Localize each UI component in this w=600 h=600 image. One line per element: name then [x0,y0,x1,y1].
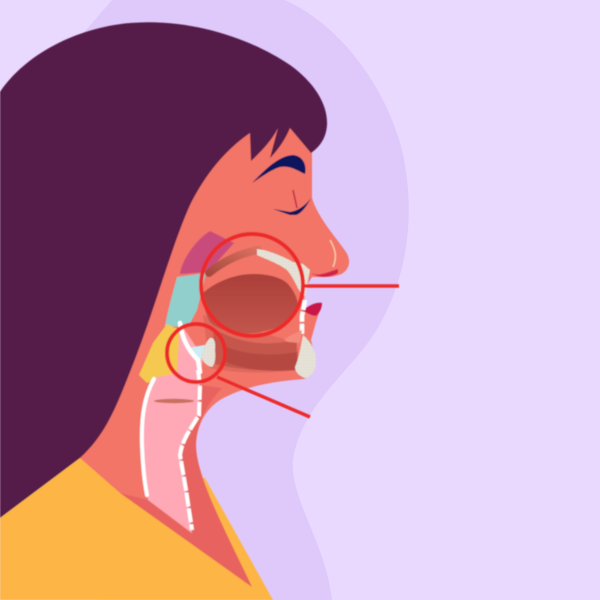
small red circle: throat area [167,324,225,382]
airway light blue [188,345,205,360]
yellow cartilage [139,324,180,383]
throat muscle bands [203,315,300,373]
trachea front dashed line [180,370,200,530]
white mouth line [302,300,305,335]
soft palate [209,250,258,273]
epiglottis white outline [180,323,200,372]
teal pharynx section [165,273,206,327]
lavender background shape [60,0,409,600]
upper lip [311,269,338,277]
trachea ridge [154,399,194,403]
yellow shirt [0,458,273,600]
eyebrow [252,155,306,183]
lower lip [303,303,322,316]
pointer line from small circle [217,377,310,417]
nasopharynx [180,231,234,274]
face and neck skin [80,120,349,587]
closed eye and lashes [273,198,311,215]
chin deposit [295,335,316,378]
trachea back line [142,379,154,495]
eye crease [293,190,297,208]
pointer line from large circle [304,284,399,288]
large red circle: nasal and mouth area [201,234,303,336]
neck shadow [120,385,252,587]
mouth cavity [203,274,298,333]
nasal passage deposit [257,249,310,296]
nose highlight [330,240,335,267]
pink trachea [142,323,203,533]
lower gum [284,330,302,343]
throat deposit [202,338,215,367]
hair [0,22,327,518]
